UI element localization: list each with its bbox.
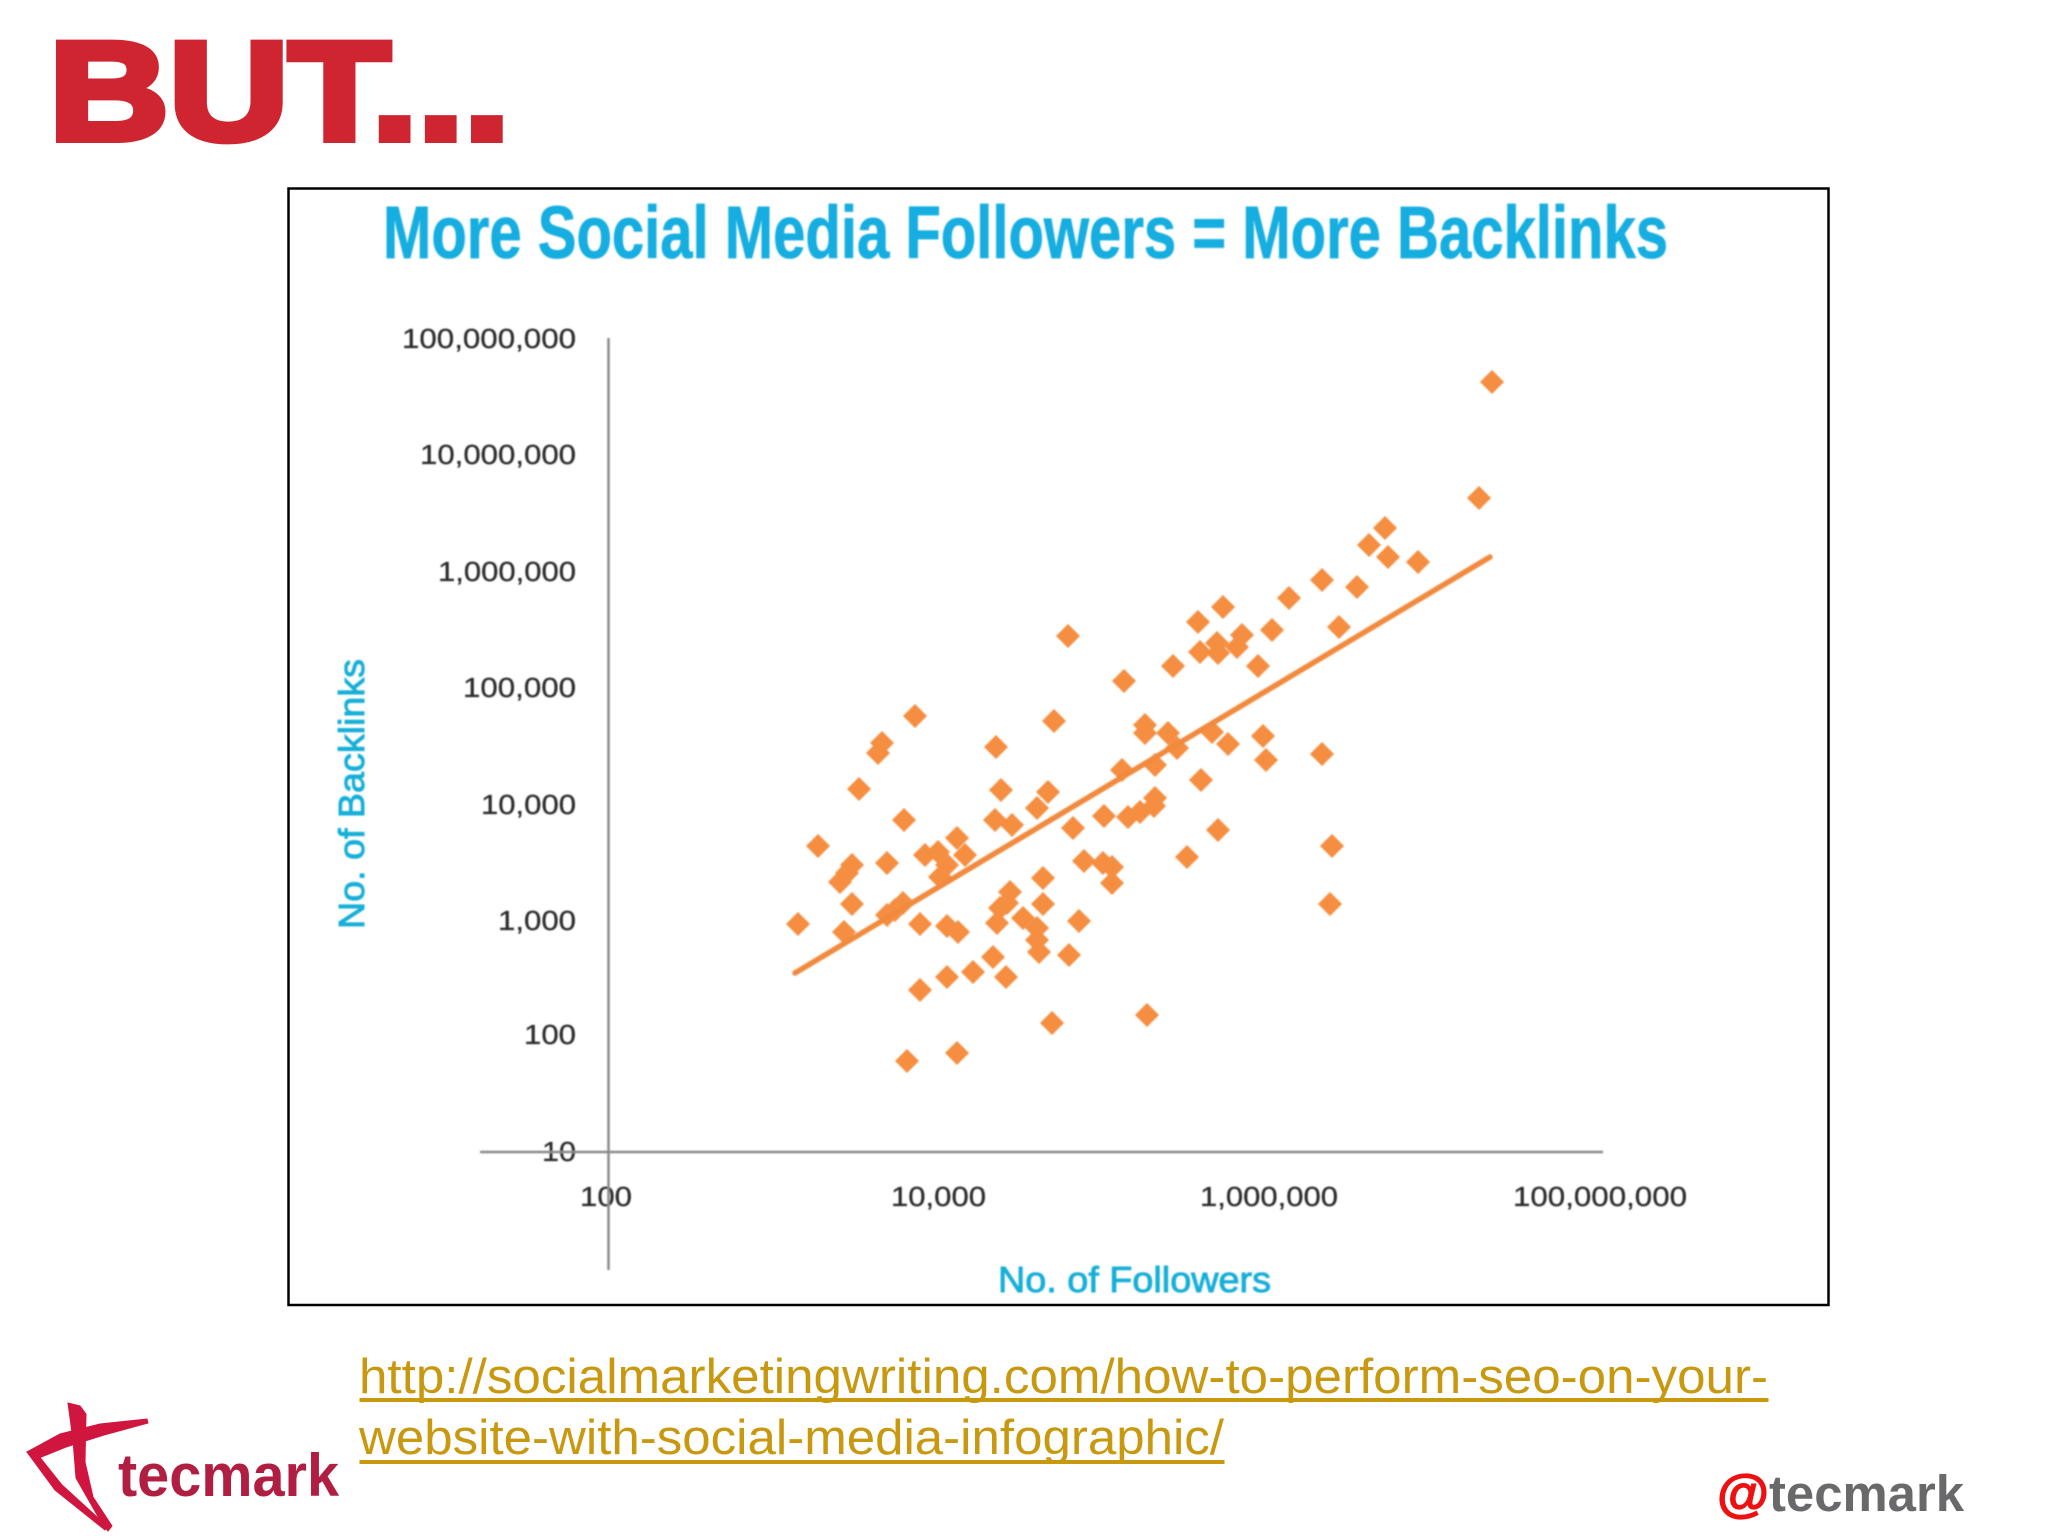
y axis labels: 100: [524, 1019, 576, 1050]
y axis labels: 10,000: [481, 789, 576, 820]
y axis labels: 100,000: [463, 672, 576, 703]
logo wordmark: tecmark: [118, 1442, 340, 1509]
source link: [358, 1349, 1768, 1465]
x axis labels: 100: [580, 1181, 632, 1212]
y axis labels: 1,000,000: [438, 556, 576, 587]
social handle: @tecmark: tecmark: [1769, 1465, 1965, 1522]
x axis title: No. of Followers: [998, 1259, 1271, 1300]
y axis labels: 10,000,000: [420, 439, 576, 470]
chart heading: More Social Media Followers = More Backlinks: [383, 191, 1668, 274]
trend line: [795, 557, 1490, 973]
logo: tecmark: [27, 1403, 340, 1531]
chart axes: [480, 338, 1603, 1270]
y axis labels: 1,000: [498, 905, 576, 936]
social handle: @tecmark: @: [1717, 1465, 1769, 1523]
source link: http://socialmarketingwriting.com/how-to-perform-seo-on-your-: [359, 1349, 1768, 1404]
title: BUT...: BUT...: [49, 12, 510, 170]
panel: scatter chart frame: [288, 188, 1828, 1305]
x axis labels: 1,000,000: [1200, 1181, 1338, 1212]
source link: website-with-social-media-infographic/: [358, 1410, 1224, 1465]
x axis labels: 100,000,000: [1513, 1181, 1687, 1212]
scatter points: [786, 370, 1504, 1073]
logo mark: red cross: [27, 1403, 148, 1531]
y axis labels: 10: [542, 1136, 576, 1167]
x axis labels: 10,000: [891, 1181, 986, 1212]
y axis title: No. of Backlinks: [331, 659, 372, 929]
y axis labels: 100,000,000: [402, 323, 576, 354]
y axis labels: [402, 323, 576, 1167]
x axis labels: [580, 1181, 1687, 1212]
